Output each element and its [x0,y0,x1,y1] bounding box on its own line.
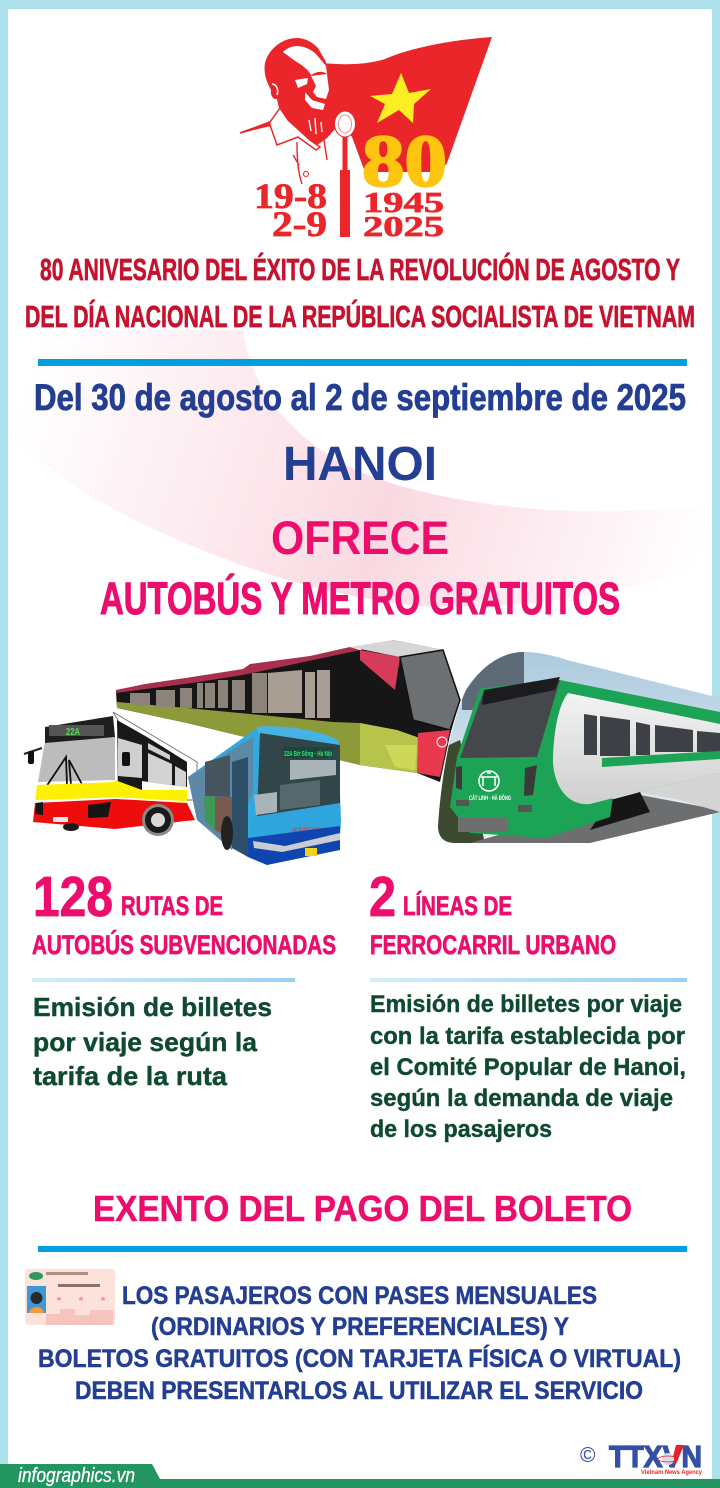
illustration: blue bus: 22A Bờ Sông - Hà Nội [284,749,332,758]
dates: 2025 [363,211,444,243]
emblem: 80 years [240,37,492,244]
illustration: green metro train: CÁT LINH - HÀ ĐÔNG [469,794,511,802]
text: passes: LOS PASAJEROS CON PASES MENSUALES [122,1282,597,1310]
illustration: blue bus: XE BUÝT DỊCH VỤ [292,827,328,834]
text: passes: DEBEN PRESENTARLOS AL UTILIZAR EL SERVICIO [75,1377,643,1405]
star [370,73,431,123]
heading: ofrece [100,511,620,624]
footer site name: infographics.vn [18,1465,135,1487]
text: passes [38,1282,681,1405]
text: rail fare: con la tarifa establecida por [370,1023,685,1050]
background swoosh [8,330,712,607]
illustration: green metro train [430,645,720,845]
logo on train [479,771,499,791]
flag [322,37,492,172]
rule under rail stat [370,978,687,982]
icon: pass card [25,1269,115,1325]
rule under bus stat [32,978,295,982]
heading: exempt: EXENTO DEL PAGO DEL BOLETO [93,1188,632,1229]
logo: TTXVN: TTXVN [609,1439,702,1474]
dates: 19-8 [254,176,327,216]
text: bus fare [33,992,272,1091]
text: rail fare: el Comité Popular de Hanoi, [370,1054,686,1081]
stat: urban rail [369,865,616,960]
title [25,251,695,334]
text: bus fare: por viaje según la [33,1027,258,1057]
text: rail fare [370,991,686,1143]
stat: bus routes: AUTOBÚS SUBVENCIONADAS [32,929,336,960]
divider bottom [38,1246,687,1252]
microphone [334,111,356,237]
text: passes: (ORDINARIOS Y PREFERENCIALES) Y [151,1313,569,1341]
stat: urban rail: LÍNEAS DE [403,890,512,921]
heading: Hanoi: HANOI [283,438,437,491]
dates: 1945 [363,187,444,219]
illustration: yellow and red bus [24,712,197,836]
logo: TTXVN: Vietnam News Agency [641,1470,703,1476]
divider top [38,359,687,366]
footer band [0,1464,720,1488]
illustration: yellow and red bus: 22A [66,727,80,738]
text: bus fare: Emisión de billetes [33,992,272,1022]
text: rail fare: Emisión de billetes por viaje [370,991,682,1018]
dates: 2-9 [272,204,327,244]
text: rail fare: según la demanda de viaje [370,1085,673,1112]
stat: bus routes [32,865,336,960]
illustration: red metro train [116,640,460,782]
80 numeral: 80 [362,121,447,203]
illustration: blue bus [188,726,341,865]
text: bus fare: tarifa de la ruta [33,1061,228,1091]
copyright mark: © [580,1444,596,1467]
stat: bus routes: 128 [33,865,113,929]
text: passes: BOLETOS GRATUITOS (CON TARJETA FÍSICA O VIRTUAL) [38,1344,681,1373]
stat: urban rail: 2 [369,865,396,929]
stat: urban rail: FERROCARRIL URBANO [370,930,616,960]
heading: ofrece: OFRECE [271,511,449,564]
portrait [240,38,345,184]
text: rail fare: de los pasajeros [370,1116,552,1143]
dates [254,176,444,244]
stat: bus routes: RUTAS DE [121,891,223,921]
